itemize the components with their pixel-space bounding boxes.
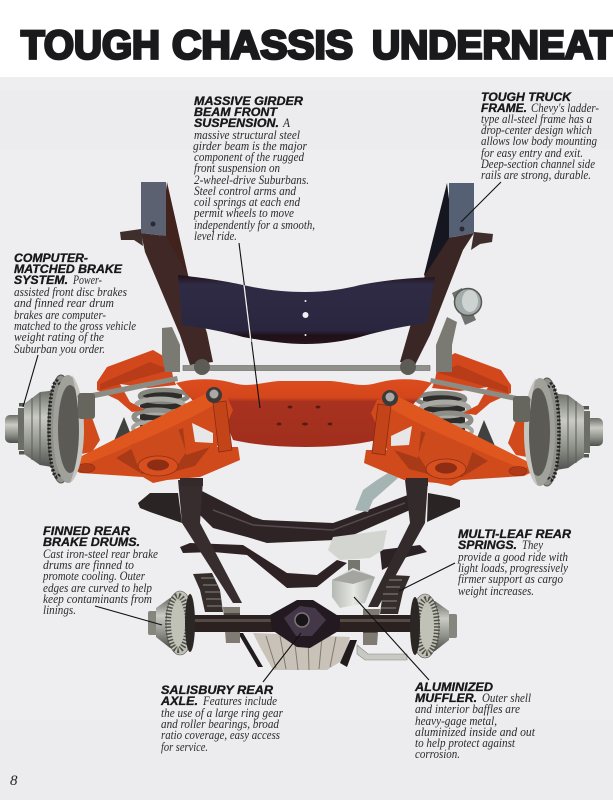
girder holes [276,406,332,426]
callout: multi-leaf rear springs: light loads, progressively [458,561,568,575]
callout: massive girder beam front suspension [193,96,315,243]
callout: multi-leaf rear springs [457,529,572,598]
title: TOUGH [21,24,160,68]
steering gear [452,288,482,325]
callout: massive girder beam front suspension: 2-wheel-drive Suburbans. [194,173,309,187]
cross member holes [302,300,308,336]
callout: massive girder beam front suspension: coil springs at each end [194,195,301,209]
callout: aluminized muffler: and interior baffles are [415,702,520,716]
callout: finned rear brake drums: promote cooling. Outer [42,569,145,583]
callout: aluminized muffler: aluminized inside and out [415,725,535,739]
title [21,24,613,68]
callout: massive girder beam front suspension: component of the rugged [194,150,305,164]
coil springs [133,390,472,437]
callout: salisbury rear axle: Features include [202,694,277,708]
callout: finned rear brake drums [42,526,158,617]
exhaust tail pipe [357,645,407,660]
callout: finned rear brake drums: BRAKE DRUMS. [43,537,140,549]
callout: computer-matched brake system: assisted front disc brakes [14,285,127,299]
leaf springs [193,573,410,645]
rear brake drums [148,591,457,658]
callout: salisbury rear axle: the use of a large ring gear [161,706,283,720]
callout: aluminized muffler: heavy-gage metal, [415,714,497,728]
callout: tough truck frame [480,92,599,182]
callout: finned rear brake drums: drums are finned to [43,558,134,572]
title: CHASSIS [172,24,353,68]
callout: finned rear brake drums: linings. [43,603,76,617]
callout: aluminized muffler: to help protect against [415,736,515,750]
callout: massive girder beam front suspension: independently for a smooth, [194,218,315,232]
callout: aluminized muffler: Outer shell [482,691,531,705]
callout: massive girder beam front suspension: BEAM FRONT [194,107,278,119]
callout: salisbury rear axle [160,685,283,754]
leader lines [23,182,501,682]
callout: aluminized muffler: MUFFLER. [415,693,477,705]
callout: multi-leaf rear springs: provide a good ride with [457,550,568,564]
frame below front suspension [180,478,428,486]
callout: massive girder beam front suspension: A [282,116,290,130]
callout: computer-matched brake system: Suburban you order. [14,342,105,356]
callout: salisbury rear axle: SALISBURY REAR [161,685,274,697]
callout: tough truck frame: allows low body mounting [481,134,597,148]
callout: massive girder beam front suspension: massive structural steel [194,128,300,142]
exhaust pipe and resonator [328,470,398,578]
callout: tough truck frame: Chevy's ladder- [531,101,599,115]
tie rod and steering linkage [77,317,531,422]
callout: multi-leaf rear springs: weight increases. [458,584,534,598]
cross member [178,275,435,344]
callout: tough truck frame: TOUGH TRUCK [481,92,572,104]
muffler [332,568,375,608]
callout: aluminized muffler: corrosion. [415,747,460,761]
callout: aluminized muffler: ALUMINIZED [414,682,493,694]
callout: multi-leaf rear springs: They [522,538,543,552]
callout: multi-leaf rear springs: SPRINGS. [458,540,517,552]
callout: salisbury rear axle: ratio coverage, easy access [161,728,280,742]
callout: computer-matched brake system [14,253,136,356]
callout: tough truck frame: rails are strong, durable. [481,168,591,182]
callout: finned rear brake drums: keep contaminants from [43,592,152,606]
callout: massive girder beam front suspension: permit wheels to move [193,206,294,220]
lower control arms [68,387,536,486]
callout: tough truck frame: drop-center design which [481,123,592,137]
callout: massive girder beam front suspension: Steel control arms and [194,184,297,198]
callout: tough truck frame: FRAME. [481,103,527,115]
callout: computer-matched brake system: Power- [72,273,102,287]
callout: multi-leaf rear springs: MULTI-LEAF REAR [458,529,572,541]
callout: tough truck frame: Deep-section channel side [480,157,595,171]
callout: finned rear brake drums: Cast iron-steel rear brake [43,547,158,561]
callout: computer-matched brake system: COMPUTER- [14,253,88,265]
callout: massive girder beam front suspension: MASSIVE GIRDER [194,96,304,108]
callout: computer-matched brake system: brakes are computer- [14,308,106,322]
callout: salisbury rear axle: for service. [161,740,208,754]
front disc brakes [5,375,603,486]
callout: computer-matched brake system: SYSTEM. [14,275,68,287]
callout: computer-matched brake system: MATCHED BRAKE [14,264,122,276]
frame rear rails [178,480,428,607]
callout: tough truck frame: type all-steel frame has a [481,112,592,126]
frame rails [120,182,493,365]
callout: computer-matched brake system: weight rating of the [14,330,104,344]
callout: finned rear brake drums: edges are curved to help [43,581,152,595]
callout: massive girder beam front suspension: girder beam is the major [193,139,307,153]
callout: finned rear brake drums: FINNED REAR [43,526,131,538]
fuel tank [238,633,357,670]
callout: computer-matched brake system: matched to the gross vehicle [14,319,136,333]
rear frame cross members [138,490,460,588]
red girder beam [176,379,432,447]
callout: multi-leaf rear springs: firmer support as cargo [458,572,563,586]
page number: 8 [10,773,18,789]
callout: massive girder beam front suspension: SUSPENSION. [194,118,279,130]
callout: massive girder beam front suspension: level ride. [194,229,237,243]
callout: aluminized muffler [414,682,535,761]
callout: massive girder beam front suspension: front suspension on [194,161,280,175]
illustration: chassis [5,182,603,670]
callout: computer-matched brake system: and finned rear drum [14,296,114,310]
rear axle [188,600,417,648]
callout: tough truck frame: for easy entry and exit. [481,146,583,160]
callout: salisbury rear axle: and roller bearings, broad [161,717,280,731]
callout: salisbury rear axle: AXLE. [160,696,198,708]
upper red arms and knuckles [67,350,541,459]
